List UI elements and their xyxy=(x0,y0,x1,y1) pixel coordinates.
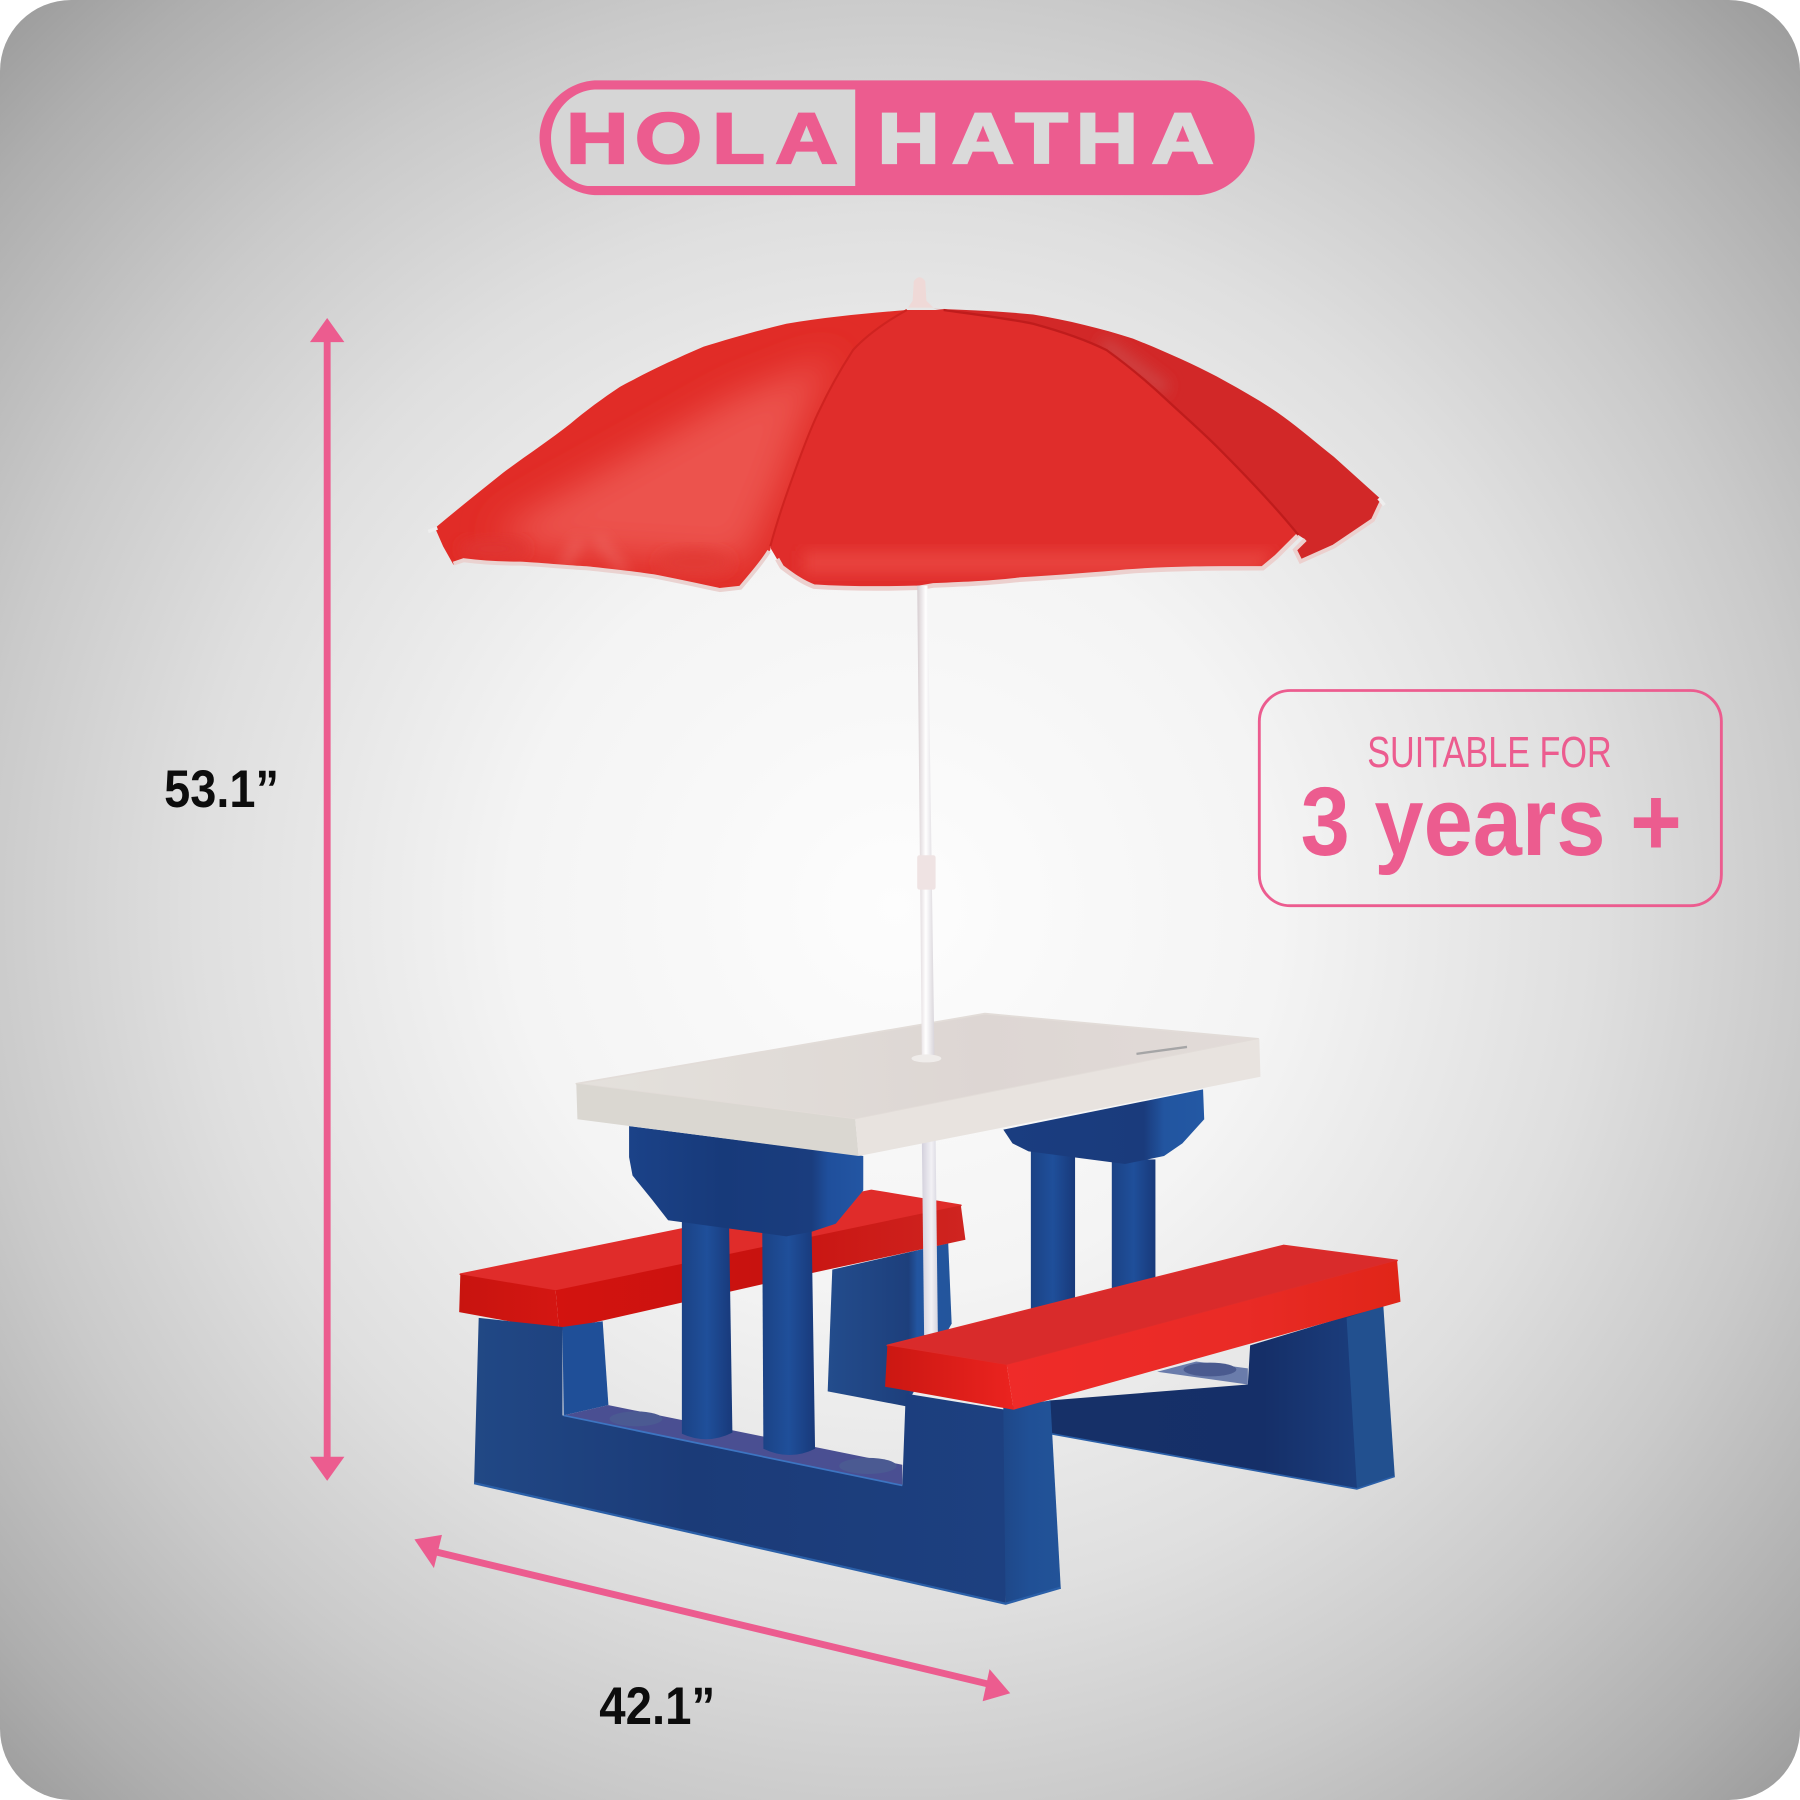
logo: Hola Hatha: HOLA xyxy=(566,98,838,178)
centre panel xyxy=(770,310,1296,586)
hem trim xyxy=(453,551,769,590)
callout: suitable for 3 years plus: SUITABLE FOR xyxy=(1367,729,1612,777)
left panel xyxy=(436,310,904,588)
seams xyxy=(770,310,907,546)
table: front bench frame xyxy=(474,1318,1061,1604)
logo: Hola Hatha: HATHA xyxy=(878,98,1214,178)
table: front support xyxy=(629,1126,863,1236)
umbrella pole: upper part xyxy=(911,585,941,1062)
finial xyxy=(908,277,933,308)
table: back posts xyxy=(1031,1148,1155,1311)
callout: suitable for 3 years plus: 3 years + xyxy=(1301,767,1682,876)
table: back bench xyxy=(459,1190,965,1330)
table: front posts xyxy=(682,1217,815,1455)
right panel xyxy=(934,308,1380,559)
label: height 53.1 inches: 53.1” xyxy=(164,760,279,819)
umbrella canopy xyxy=(425,277,1389,597)
callout: suitable for 3 years plus xyxy=(1259,690,1721,906)
arrow: height dimension xyxy=(310,318,344,1481)
label: width 42.1 inches: 42.1” xyxy=(599,1677,715,1736)
logo: Hola Hatha xyxy=(540,80,1255,195)
table top xyxy=(576,1014,1260,1156)
table: right bench frame xyxy=(1049,1305,1395,1489)
arrow: width dimension xyxy=(414,1535,1010,1701)
table: back leg xyxy=(828,1243,952,1406)
table: back support xyxy=(1003,1089,1204,1164)
table: front bench xyxy=(885,1246,1401,1410)
umbrella pole: lower part xyxy=(922,1136,938,1335)
